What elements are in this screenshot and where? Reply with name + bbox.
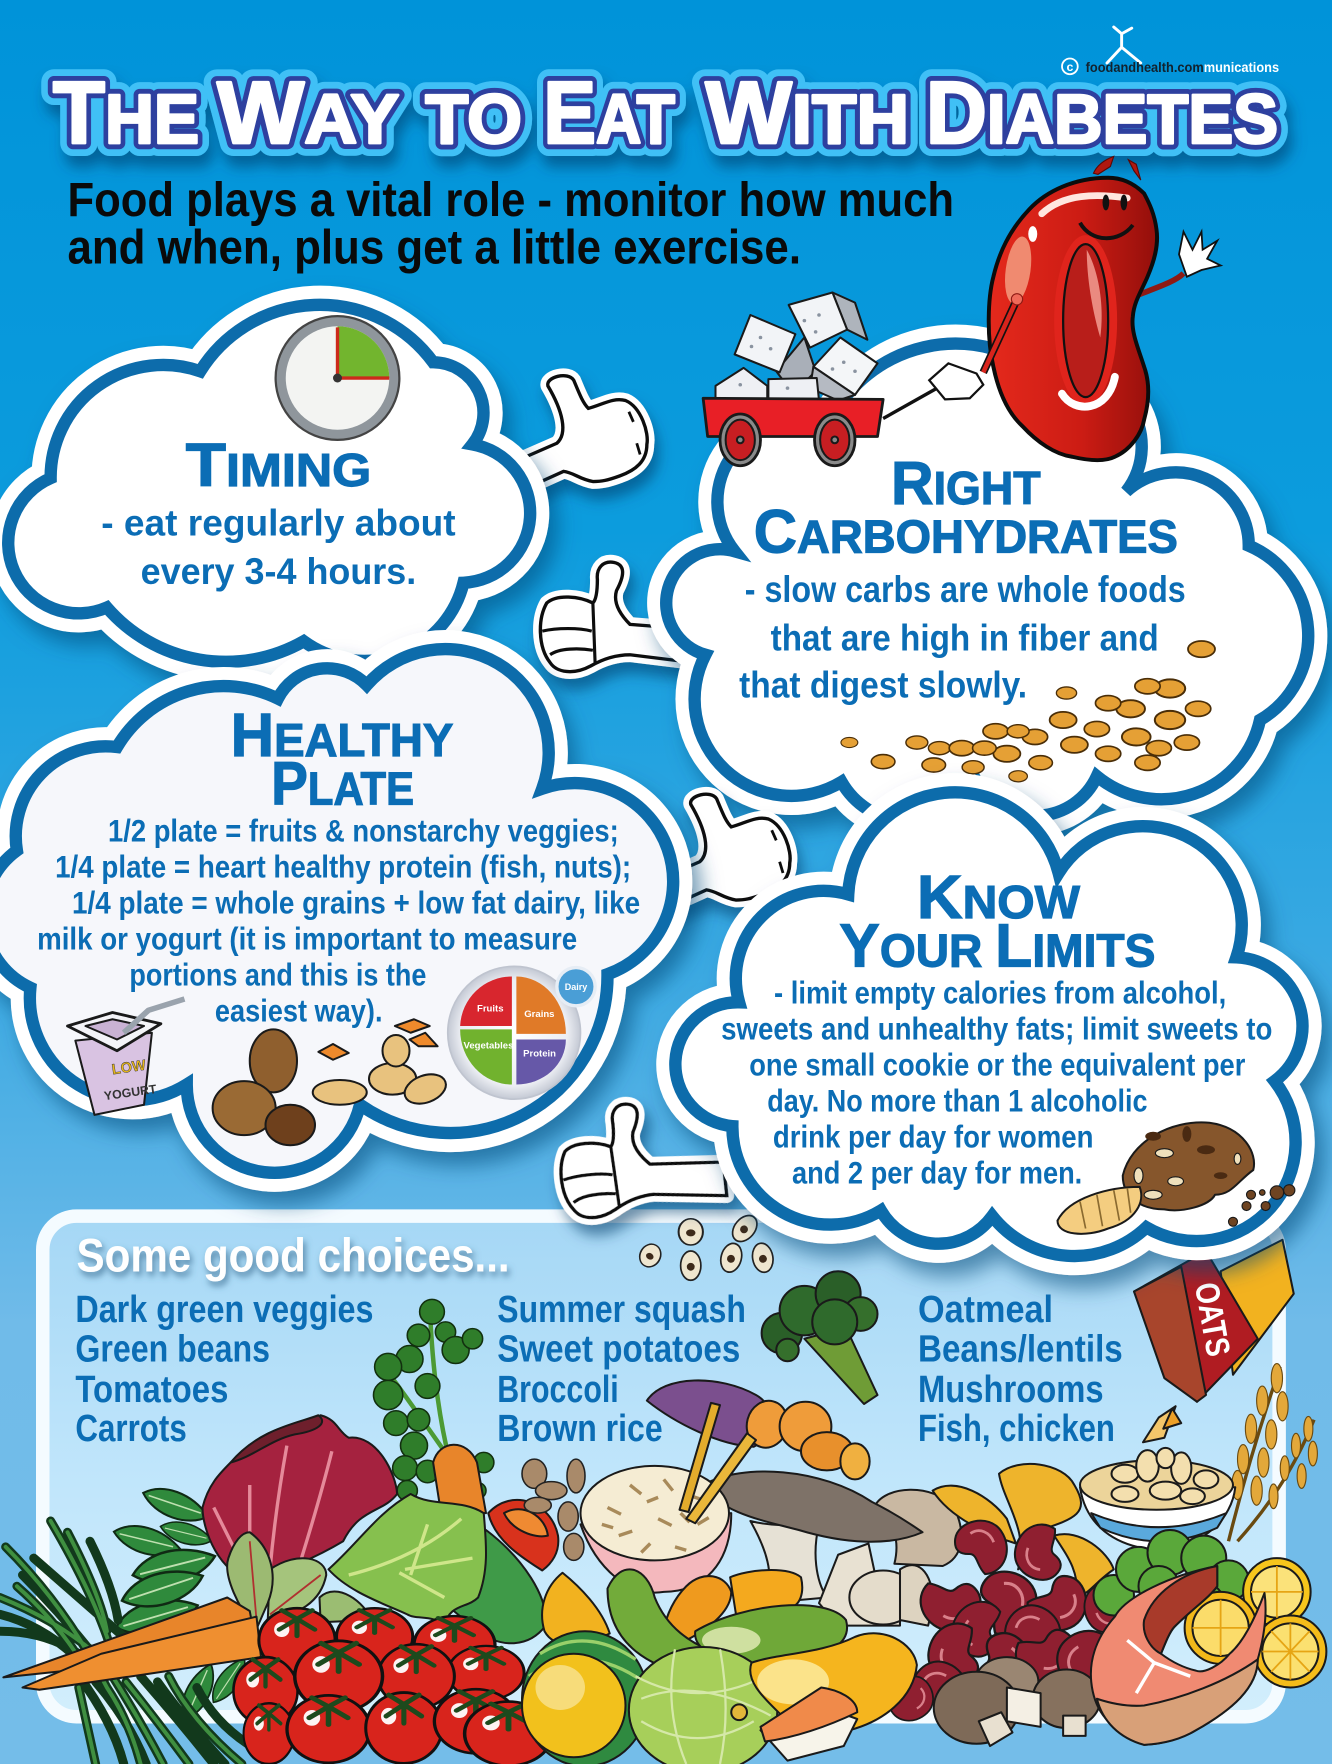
icon: kidney bean character bbox=[929, 156, 1221, 460]
food list: column 2: Brown rice bbox=[497, 1407, 663, 1450]
food pile: lemons bbox=[1185, 1558, 1326, 1688]
icon: MyPlate: Grains bbox=[524, 1009, 555, 1020]
text: right carbohydrates body: that are high in fiber and bbox=[771, 616, 1159, 658]
text: timing body: - eat regularly about bbox=[101, 501, 456, 543]
heading: healthy plate: HEALTHY bbox=[231, 701, 454, 769]
text: healthy plate body: easiest way). bbox=[215, 993, 382, 1029]
icon: oats box bbox=[1134, 1240, 1294, 1442]
text: healthy plate body: 1/4 plate = heart healthy protein (fish, nuts); bbox=[55, 849, 631, 885]
text: timing body: every 3-4 hours. bbox=[141, 550, 416, 592]
title: DIABETES bbox=[926, 64, 1278, 162]
cloud: know your limits bbox=[675, 792, 1302, 1256]
icon: lentils bbox=[841, 641, 1215, 782]
heading: know your limits: YOUR LIMITS bbox=[839, 911, 1155, 979]
title: DIABETES bbox=[926, 64, 1278, 162]
subtitle bbox=[68, 173, 954, 274]
food pile: parsley carrot bbox=[374, 1299, 494, 1513]
food pile: big mushroom bbox=[703, 1472, 961, 1603]
icon: MyPlate bbox=[448, 966, 595, 1099]
text: healthy plate body: 1/2 plate = fruits & nonstarchy veggies; bbox=[108, 813, 619, 849]
text: know your limits body bbox=[721, 974, 1272, 1191]
icon: MyPlate: Vegetables bbox=[464, 1041, 513, 1052]
food list: column 3 bbox=[918, 1288, 1123, 1450]
title: WAY bbox=[217, 64, 399, 162]
text: know your limits body: - limit empty calories from alcohol, bbox=[774, 975, 1226, 1011]
cloud: right carbohydrates bbox=[666, 344, 1308, 822]
food list: column 3: Fish, chicken bbox=[918, 1407, 1115, 1450]
food pile: green beans bbox=[0, 1521, 248, 1764]
icon: walnuts bbox=[213, 1029, 315, 1145]
cloud: timing bbox=[8, 305, 530, 662]
icon: MyPlate: Protein bbox=[523, 1048, 556, 1059]
food pile: rice bowl bbox=[580, 1403, 756, 1593]
heading: right carbohydrates: CARBOHYDRATES bbox=[754, 497, 1178, 565]
text: healthy plate body: milk or yogurt (it is important to measure bbox=[37, 921, 577, 957]
food list: column 3: Beans/lentils bbox=[918, 1327, 1123, 1370]
heading: healthy plate bbox=[231, 701, 454, 817]
icon: yogurt cup bbox=[68, 999, 184, 1115]
icon: sugar cubes in wagon bbox=[703, 292, 937, 466]
title: TO bbox=[425, 80, 522, 158]
text: timing body bbox=[101, 502, 456, 592]
food list: column 3: Oatmeal bbox=[918, 1288, 1053, 1331]
food pile: lettuce bbox=[328, 1494, 546, 1643]
food pile: round squash and melon bbox=[522, 1631, 777, 1764]
food list: column 2: Summer squash bbox=[497, 1288, 746, 1331]
title: THE bbox=[53, 64, 199, 162]
icon: yogurt cup: YOGURT bbox=[103, 1082, 158, 1103]
food list: column 1: Tomatoes bbox=[75, 1368, 228, 1411]
text: healthy plate body bbox=[37, 812, 640, 1028]
food list: column 2: Broccoli bbox=[497, 1368, 619, 1411]
food pile: kidney beans bbox=[881, 1513, 1137, 1738]
title: EAT bbox=[543, 64, 675, 162]
title: TO bbox=[425, 80, 522, 158]
heading: some good choices: Some good choices... bbox=[76, 1229, 510, 1282]
food list: column 2 bbox=[497, 1288, 746, 1450]
heading: know your limits: KNOW bbox=[917, 863, 1080, 931]
icon: thumbs up, know your limits top bbox=[638, 794, 790, 916]
text: know your limits body: drink per day for women bbox=[773, 1119, 1094, 1155]
icon: thumbs up, carbohydrates bbox=[540, 562, 703, 672]
food pile: yellow squash bbox=[750, 1633, 917, 1730]
icon: thumbs up, know your limits bottom bbox=[554, 1095, 728, 1220]
text: know your limits body: sweets and unhealthy fats; limit sweets to bbox=[721, 1011, 1272, 1047]
icon: broccoli bbox=[762, 1271, 878, 1404]
logo: food and health communications: foodandhealth.communications bbox=[1086, 60, 1279, 75]
title bbox=[53, 64, 1278, 162]
title: THE bbox=[53, 64, 199, 162]
icon: oats box: OATS bbox=[1187, 1280, 1237, 1359]
text: know your limits body: day. No more than 1 alcoholic bbox=[767, 1083, 1148, 1119]
food pile: brown mushrooms bbox=[934, 1657, 1100, 1746]
food list: column 2: Sweet potatoes bbox=[497, 1327, 740, 1370]
icon: MyPlate: Dairy bbox=[565, 982, 587, 992]
text: right carbohydrates body bbox=[739, 568, 1186, 706]
heading: timing: TIMING bbox=[186, 431, 371, 499]
food list: column 1: Dark green veggies bbox=[75, 1288, 374, 1331]
title: TO bbox=[425, 80, 522, 158]
text: right carbohydrates body: that digest slowly. bbox=[739, 663, 1027, 705]
title: WITH bbox=[705, 64, 909, 162]
icon: MyPlate: Fruits bbox=[477, 1003, 504, 1014]
icon: clock bbox=[276, 316, 399, 440]
text: healthy plate body: 1/4 plate = whole grains + low fat dairy, like bbox=[72, 885, 640, 921]
icon: yogurt cup: LOW bbox=[111, 1058, 147, 1078]
heading: healthy plate: PLATE bbox=[271, 749, 414, 817]
title: WITH bbox=[705, 64, 909, 162]
title: EAT bbox=[543, 64, 675, 162]
icon: cookie and cracker bbox=[1058, 1122, 1295, 1234]
text: know your limits body: one small cookie or the equivalent per bbox=[749, 1047, 1245, 1083]
text: know your limits body: and 2 per day for men. bbox=[792, 1155, 1082, 1191]
food pile: radicchio bbox=[202, 1415, 397, 1581]
food pile: sushi bbox=[760, 1688, 857, 1761]
panel: some good choices bbox=[43, 1216, 1279, 1717]
food pile: carrots bbox=[3, 1598, 261, 1690]
icon: wheat bbox=[1228, 1364, 1317, 1541]
food list: column 1: Green beans bbox=[75, 1327, 270, 1370]
food pile: white mushrooms bbox=[819, 1544, 934, 1626]
heading: right carbohydrates bbox=[754, 449, 1178, 565]
food pile: salmon steak bbox=[1091, 1566, 1266, 1745]
food pile: chard leaf bbox=[227, 1532, 371, 1629]
subtitle: Food plays a vital role - monitor how much bbox=[68, 173, 954, 227]
food pile: sweet potato bbox=[647, 1380, 870, 1479]
food pile: salad greens bbox=[1094, 1530, 1249, 1623]
food pile: tomato slice bbox=[488, 1500, 558, 1570]
heading: know your limits bbox=[839, 863, 1155, 979]
food pile: chanterelles bbox=[933, 1464, 1114, 1598]
cloud: healthy plate bbox=[0, 649, 673, 1173]
food list: column 1: Carrots bbox=[75, 1407, 187, 1450]
logo: food and health communications bbox=[1062, 27, 1279, 75]
title: WAY bbox=[217, 64, 399, 162]
text: right carbohydrates body: - slow carbs are whole foods bbox=[745, 568, 1186, 610]
title: WITH bbox=[705, 64, 909, 162]
heading: right carbohydrates: RIGHT bbox=[891, 449, 1041, 517]
icon: thumbs up, timing bbox=[495, 376, 647, 497]
title: DIABETES bbox=[926, 64, 1278, 162]
logo: food and health communications: c bbox=[1066, 60, 1073, 74]
icon: peanuts bbox=[313, 1019, 450, 1109]
food pile: small beans bbox=[522, 1459, 585, 1560]
title: WAY bbox=[217, 64, 399, 162]
food list: column 1 bbox=[75, 1288, 374, 1450]
icon: white beans bbox=[636, 1211, 775, 1280]
food pile: squash bbox=[542, 1569, 847, 1675]
title: EAT bbox=[543, 64, 675, 162]
food pile: tomatoes bbox=[233, 1608, 552, 1764]
text: healthy plate body: portions and this is the bbox=[129, 957, 426, 993]
subtitle: and when, plus get a little exercise. bbox=[68, 220, 801, 274]
food pile: spinach bbox=[110, 1479, 254, 1724]
food pile: oat bowl bbox=[1080, 1448, 1235, 1550]
food list: column 3: Mushrooms bbox=[918, 1368, 1104, 1411]
title: THE bbox=[53, 64, 199, 162]
